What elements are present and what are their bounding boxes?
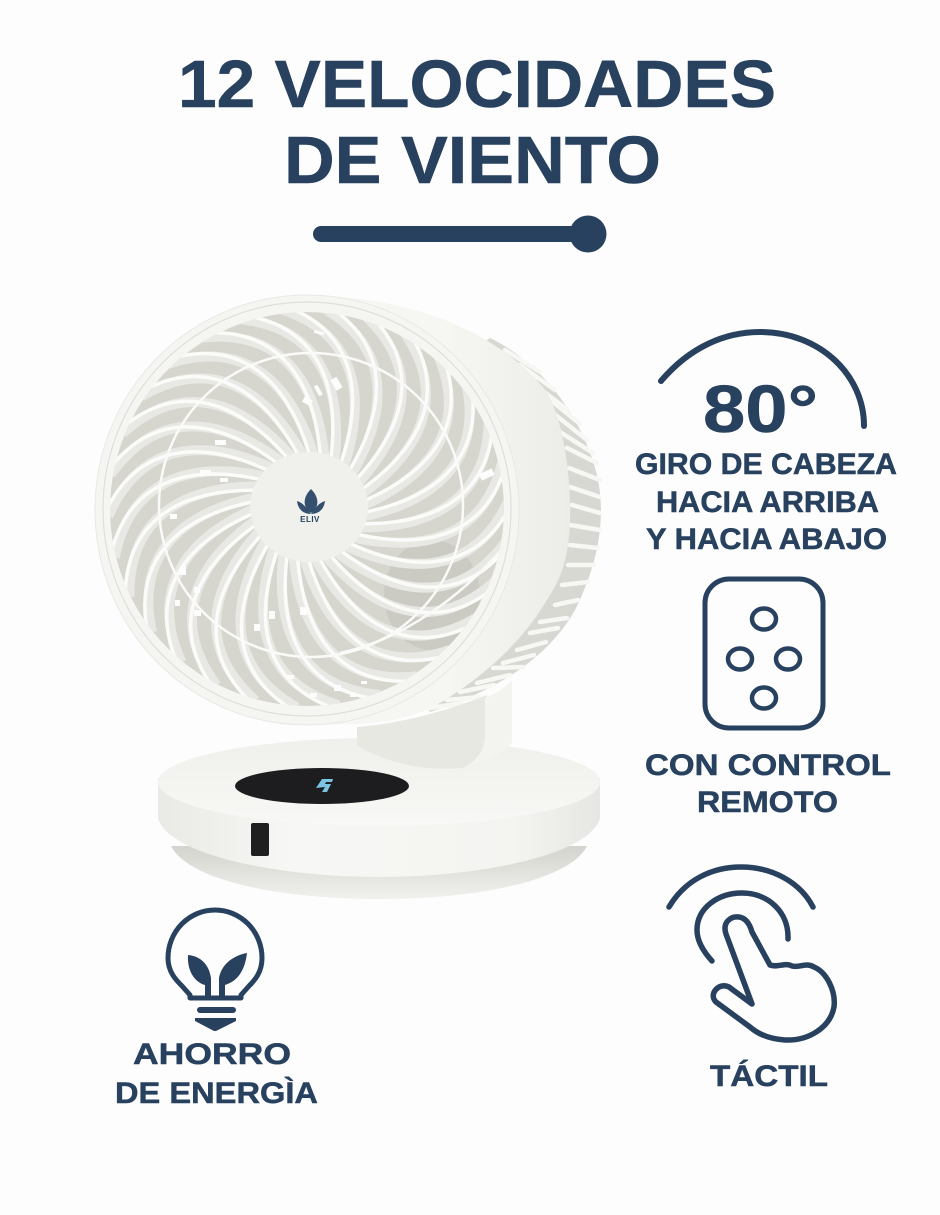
remote label: REMOTO [697,786,838,819]
rotation description: HACIA ARRIBA [656,486,879,519]
rotation angle value: 80° [703,372,818,447]
title: DE VIENTO [284,123,661,198]
icon: touch hand [669,867,834,1040]
remote label: CON CONTROL [645,749,891,782]
speed slider [313,216,606,252]
rotation description [635,448,897,556]
base underside [171,846,587,899]
stand neck strip [467,680,512,766]
rotation description: GIRO DE CABEZA [635,448,897,481]
energy saving label: DE ENERGÌA [115,1076,318,1110]
fan rear vent ribs [360,338,601,712]
feature: touch [669,867,834,1093]
icon: remote [705,579,823,728]
fan front rim [95,295,519,725]
title: 12 VELOCIDADES [178,47,776,122]
base top [158,738,600,826]
fan body band [320,296,570,724]
logo: ELIV: ELIV [300,515,320,524]
feature: energy saving [115,910,318,1110]
grille wire ring [159,353,463,657]
logo: ELIV [297,489,325,524]
title [178,47,776,198]
motor shadow [384,540,480,650]
fan product illustration [95,295,601,899]
base display [235,768,409,804]
grille wire arc [340,550,500,653]
hub [250,452,368,562]
base side [158,778,600,877]
base button [251,823,269,856]
openings between blades [170,330,495,697]
spiral blades [110,312,504,706]
feature: 80 degree head rotation [635,332,897,556]
stand neck block [357,695,487,769]
icon: light bulb with leaves [168,910,262,1031]
icon: rotation arc [661,332,864,426]
grille [110,312,504,706]
remote label [645,749,891,819]
energy saving label: AHORRO [133,1038,291,1071]
rotation description: Y HACIA ABAJO [646,523,887,556]
touch label: TÁCTIL [710,1059,828,1093]
display digit [316,779,333,792]
feature: remote control [645,579,891,819]
energy saving label [115,1038,318,1110]
